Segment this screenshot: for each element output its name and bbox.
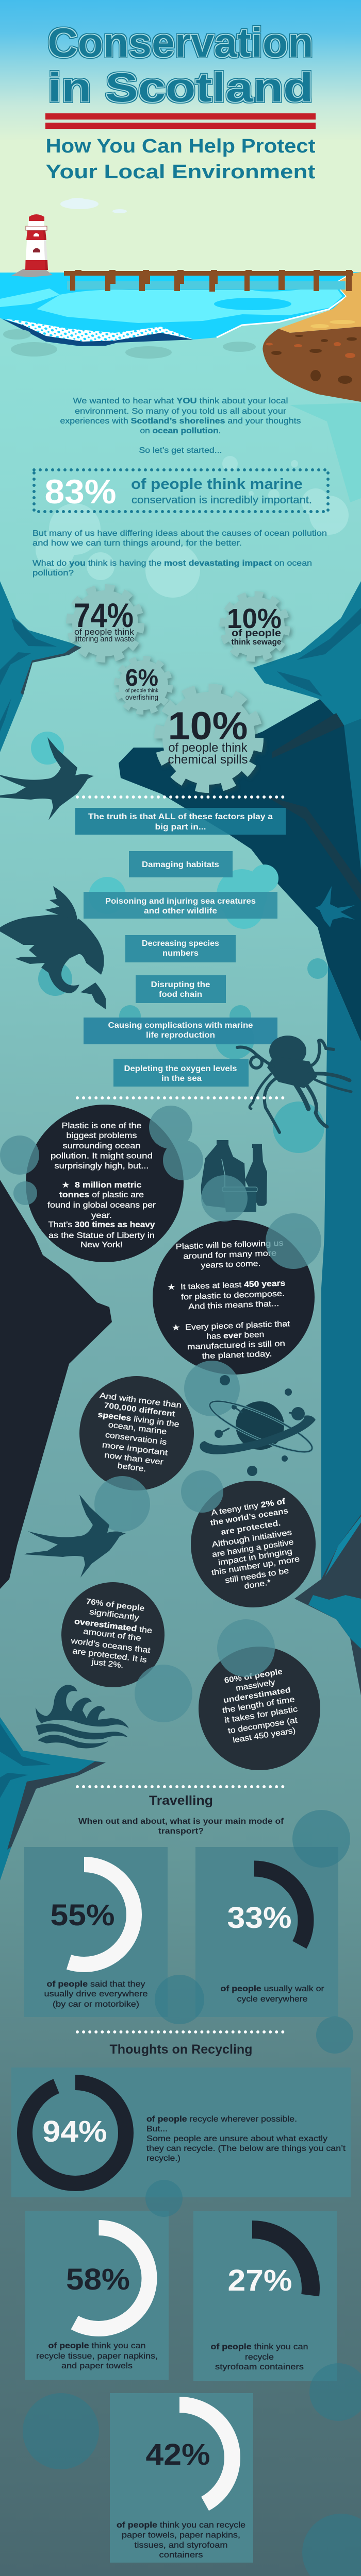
dark fact circle: species: now than ever <box>104 1451 164 1467</box>
panel: 55 percent drive: (by car or motorbike) <box>53 2000 139 2009</box>
dark fact circle: species: ocean, marine <box>108 1420 167 1436</box>
dark fact circle: plastic: New York! <box>80 1241 123 1249</box>
left cliff, lower <box>0 1717 106 1880</box>
gear: 10 percent chemical spills: 10% <box>168 704 248 748</box>
dark fact circle: protected oceans: still needs to be <box>224 1566 289 1585</box>
dark fact circle: species: 700,000 different <box>104 1401 176 1418</box>
bubbles: lower water <box>23 1810 361 2576</box>
panel: 94 percent: recycle.) <box>146 2154 180 2163</box>
dark fact circle: plastic <box>26 1105 184 1262</box>
dark fact circle: decomposition: for plastic to decompose. <box>181 1290 285 1302</box>
dark fact circle: species: more important <box>102 1440 169 1458</box>
box: decreasing species: Decreasing species <box>142 939 219 948</box>
red double rule <box>45 113 316 129</box>
box: damaging habitats <box>129 851 233 877</box>
icon: waves <box>36 1685 129 1749</box>
dark fact circle: 76 percent: world’s oceans that <box>70 1637 151 1655</box>
dark fact circle: plastic: pollution. It might sound <box>51 1152 153 1160</box>
panel: 55 percent drive: usually drive everywhere <box>44 1990 148 1998</box>
panel: 27 percent: recycle <box>245 2353 274 2362</box>
seabed ripples <box>3 329 256 359</box>
gear: 10 percent sewage: think sewage <box>231 638 282 647</box>
dark fact circle: 76 percent: significantly <box>89 1607 140 1622</box>
dark fact circle: 76 percent: are protected. It is <box>72 1647 147 1665</box>
gear: 74 percent littering <box>70 588 141 659</box>
panel: 94 percent: they can recycle. (The below are things you can’t <box>146 2144 346 2153</box>
dark fact circle: decomposition <box>153 1220 315 1375</box>
section: recycling <box>11 2042 351 2563</box>
icon: octopus <box>237 1036 351 1132</box>
intro text: So let’s get started... <box>139 446 222 455</box>
dark rock mass, left <box>0 1180 112 1589</box>
subtitle: How You Can Help Protect <box>45 135 316 157</box>
gear: 10 percent chemical spills <box>159 688 259 788</box>
box: decreasing species: numbers <box>162 949 199 958</box>
panel: 42 percent: containers <box>159 2551 203 2560</box>
icon: planet <box>200 1375 317 1476</box>
divider <box>77 2030 285 2033</box>
question: transport: When out and about, what is your main mode of <box>78 1817 284 1826</box>
panel: 33 percent walk: cycle everywhere <box>237 1995 308 2004</box>
gear: 10 percent sewage <box>223 595 287 658</box>
dark fact circle: protected oceans: Although initiatives <box>211 1528 292 1549</box>
gear: 74 percent littering: littering and waste <box>74 635 134 643</box>
dark fact circle: plastic: tonnes of plastic are <box>59 1191 144 1199</box>
dark fact circle: species <box>79 1376 194 1490</box>
panel: 33 percent walk <box>195 1847 338 2017</box>
box: poisoning: and other wildlife <box>144 907 217 916</box>
question text <box>32 529 327 578</box>
dark fact circle: protected oceans <box>191 1481 316 1607</box>
dark fact circle: 60 percent <box>199 1647 320 1770</box>
bubbles: upper water <box>36 456 349 598</box>
dark fact circle: 60 percent: the length of time <box>222 1695 296 1715</box>
dark fact circle: decomposition: ★ Every piece of plastic that <box>172 1319 290 1332</box>
gear: 10 percent sewage: of people <box>232 628 281 639</box>
box: decreasing species <box>125 935 236 962</box>
dark fact circle: decomposition: around for many more <box>183 1249 277 1261</box>
gear: 6 percent overfishing: overfishing <box>125 693 158 701</box>
panel: 94 percent: of people recycle wherever possible. <box>146 2115 297 2124</box>
pale cliff silhouette <box>290 403 361 502</box>
panel: 27 percent: of people think you can <box>210 2343 308 2351</box>
panel: 94 percent: But... <box>146 2125 168 2133</box>
subtitle <box>45 135 316 183</box>
panel: 27 percent: styrofoam containers <box>215 2363 304 2371</box>
box: disrupting food chain <box>136 975 226 1003</box>
box: reproduction: Causing complications with marine <box>108 1021 253 1030</box>
question text: and how we can turn things around, for the better. <box>32 539 242 548</box>
panel: 94 percent: Some people are unsure about what exactly <box>146 2134 327 2143</box>
dark fact circle: species: conservation is <box>105 1431 167 1447</box>
sea surface <box>0 272 361 346</box>
dark fact circle: decomposition: manufactured is still on <box>187 1340 285 1351</box>
intro text <box>60 397 301 455</box>
icon: small blue swallow <box>315 886 355 927</box>
dark fact circle: plastic: as the Statue of Liberty in <box>48 1231 155 1240</box>
box: disrupting food chain: Disrupting the <box>151 980 210 989</box>
icon: swallow two <box>24 1495 126 1578</box>
dark fact circle: 76 percent: amount of the <box>83 1627 142 1643</box>
dark fact circle: 76 percent: 76% of people <box>86 1597 145 1613</box>
dark fact circle: plastic: ★ 8 million metric <box>62 1181 142 1190</box>
dark fact circle: plastic: biggest problems <box>66 1131 137 1140</box>
shoreline foam <box>217 273 352 337</box>
panel: 42 percent: paper towels, paper napkins, <box>122 2531 240 2540</box>
box: damaging habitats: Damaging habitats <box>142 860 219 869</box>
callout: 83 percent: of people think marine <box>131 476 303 493</box>
dark fact circle: plastic: surprisingly high, but... <box>55 1162 149 1171</box>
title block <box>45 20 316 183</box>
panel: 58 percent <box>25 2211 169 2380</box>
dark fact circle: species: before. <box>117 1462 146 1473</box>
box: the truth is <box>75 808 286 835</box>
panel: 42 percent: tissues, and styrofoam <box>134 2541 228 2550</box>
panel: 42 percent: 42% <box>145 2438 210 2471</box>
dark fact circle: 60 percent: to decompose (at <box>227 1716 299 1736</box>
wooden pier <box>64 270 353 292</box>
gear: 6 percent overfishing: of people think <box>125 688 159 693</box>
callout: 83 percent <box>34 470 328 512</box>
bubbles behind fact boxes <box>38 865 328 1153</box>
question: transport: transport? <box>158 1827 204 1836</box>
panel: 27 percent: 27% <box>228 2264 292 2297</box>
panel: 58 percent: recycle tissue, paper napkins, <box>36 2352 158 2361</box>
question text: What do you think is having the most devastating impact on ocean <box>32 559 312 568</box>
box: reproduction <box>84 1018 277 1044</box>
dark fact circle: protected oceans: this number up, more <box>211 1555 300 1577</box>
panel: 58 percent: of people think you can <box>48 2342 145 2350</box>
box: disrupting food chain: food chain <box>159 990 202 999</box>
right water column band <box>321 965 361 1579</box>
question: transport <box>78 1817 284 1836</box>
dark fact circle: plastic: found in global oceans per <box>47 1201 156 1210</box>
panel: 58 percent: 58% <box>66 2263 130 2296</box>
bubbles over dark circles <box>0 1106 321 1722</box>
gear: 10 percent chemical spills: of people think <box>168 741 248 755</box>
dark fact circle: plastic: That’s 300 times as heavy <box>48 1221 155 1229</box>
box: oxygen: Depleting the oxygen levels <box>124 1064 237 1073</box>
section: travelling <box>24 1793 338 2017</box>
right cliff, upper <box>119 581 361 1042</box>
dark fact circle: decomposition: And this means that... <box>188 1299 279 1311</box>
divider <box>77 1096 285 1099</box>
panel: 58 percent: and paper towels <box>61 2362 133 2370</box>
dark fact circle: species: species living in the <box>97 1410 179 1429</box>
heading: travelling: Travelling <box>149 1793 213 1808</box>
gear: 74 percent littering: 74% <box>74 596 134 634</box>
box: the truth is: big part in... <box>155 823 206 832</box>
dark fact circle: species: And with more than <box>99 1391 182 1410</box>
dark fact circle: 60 percent: underestimated <box>223 1686 291 1705</box>
box: reproduction: life reproduction <box>146 1031 215 1040</box>
box: oxygen: in the sea <box>161 1074 202 1083</box>
question text: But many of us have differing ideas about the causes of ocean pollution <box>32 529 327 538</box>
title: Conservation in Scotland <box>47 20 314 110</box>
panel: 27 percent <box>193 2211 337 2381</box>
panel: 33 percent walk: of people usually walk or <box>221 1985 324 1993</box>
dark fact circle: plastic: Plastic is one of the <box>62 1122 141 1130</box>
lighthouse <box>11 214 53 277</box>
gear: 10 percent sewage: 10% <box>227 603 282 634</box>
panel: 94 percent <box>11 2067 351 2197</box>
clouds <box>60 198 127 213</box>
dark fact circle: protected oceans: are protected. <box>220 1519 281 1537</box>
title: Conservation in Scotland: in Scotland <box>47 64 314 110</box>
subtitle: Your Local Environment <box>45 161 316 183</box>
box: poisoning: Poisoning and injuring sea creatures <box>105 897 256 906</box>
question text: pollution? <box>32 569 74 578</box>
gear: 10 percent chemical spills: chemical spills <box>168 753 248 767</box>
dark fact circle: 60 percent: 60% of people <box>224 1667 283 1685</box>
icon: plastic containers <box>201 1140 267 1212</box>
gear: 74 percent littering: of people think <box>74 627 135 637</box>
dark fact circle: decomposition: has ever been <box>206 1330 265 1341</box>
dark fact circle: 76 percent: overestimated the <box>74 1617 153 1635</box>
dark fact circle: protected oceans: impact in bringing <box>218 1547 293 1567</box>
right cliff, lower <box>294 1515 361 1696</box>
gear: 6 percent overfishing: 6% <box>125 664 158 691</box>
fact boxes <box>75 808 286 1087</box>
panel: 42 percent <box>110 2393 253 2563</box>
panel: 42 percent: of people think you can recycle <box>117 2521 245 2530</box>
divider <box>77 1785 285 1788</box>
dark fact circle: decomposition: the planet today. <box>202 1349 272 1361</box>
left cliff, upper <box>0 581 81 752</box>
dark fact circle: decomposition: years to come. <box>201 1259 261 1270</box>
panel: 33 percent walk: 33% <box>227 1901 292 1935</box>
panel: 55 percent drive: 55% <box>51 1899 114 1932</box>
icon: swallow <box>0 737 94 820</box>
dark fact circle: protected oceans: A teeny tiny 2% of <box>210 1497 286 1517</box>
icon: leaping fish <box>0 886 106 1009</box>
sand and soil bank <box>262 272 361 402</box>
gear: 6 percent overfishing <box>117 658 170 712</box>
title: Conservation in Scotland: Conservation <box>47 20 314 65</box>
dark fact circle: 60 percent: it takes for plastic <box>224 1705 299 1725</box>
dark fact circle: 76 percent <box>61 1582 165 1687</box>
intro text: We wanted to hear what YOU think about your local <box>73 397 288 405</box>
dark fact circle: plastic: year. <box>91 1211 112 1220</box>
gears: what people think <box>70 588 287 788</box>
intro text: experiences with Scotland’s shorelines and your thoughts <box>60 417 301 426</box>
callout: 83 percent: conservation is incredibly important. <box>132 495 312 506</box>
panel: 94 percent: 94% <box>42 2115 107 2148</box>
bubble behind swallow <box>31 732 64 765</box>
dark fact circle: decomposition: Plastic will be following us <box>175 1239 284 1251</box>
dark fact circle: decomposition: ★ It takes at least 450 years <box>167 1279 286 1292</box>
dark fact circle: protected oceans: done.* <box>243 1578 271 1591</box>
callout: 83 percent: 83% <box>44 472 117 511</box>
box: oxygen <box>113 1059 249 1087</box>
box: poisoning <box>84 892 277 919</box>
panel: 55 percent drive <box>24 1847 168 2017</box>
dark fact circle: protected oceans: are having a positive <box>211 1538 294 1559</box>
box: the truth is: The truth is that ALL of these factors play a <box>88 812 273 821</box>
dark fact circle: protected oceans: the world’s oceans <box>209 1506 289 1528</box>
panel: 55 percent drive: of people said that they <box>46 1980 145 1989</box>
intro text: on ocean pollution . <box>140 427 221 435</box>
dark fact circle: 76 percent: just 2%. <box>91 1657 124 1670</box>
wave foam <box>5 319 193 342</box>
heading: recycling: Thoughts on Recycling <box>109 2042 253 2057</box>
dark fact circle: plastic: surrounding ocean <box>63 1142 140 1150</box>
intro text: environment. So many of you told us all about your <box>75 407 287 416</box>
dark fact circle: 60 percent: least 450 years) <box>232 1726 296 1745</box>
dark fact circle: 60 percent: massively <box>235 1678 276 1693</box>
divider <box>77 795 285 799</box>
